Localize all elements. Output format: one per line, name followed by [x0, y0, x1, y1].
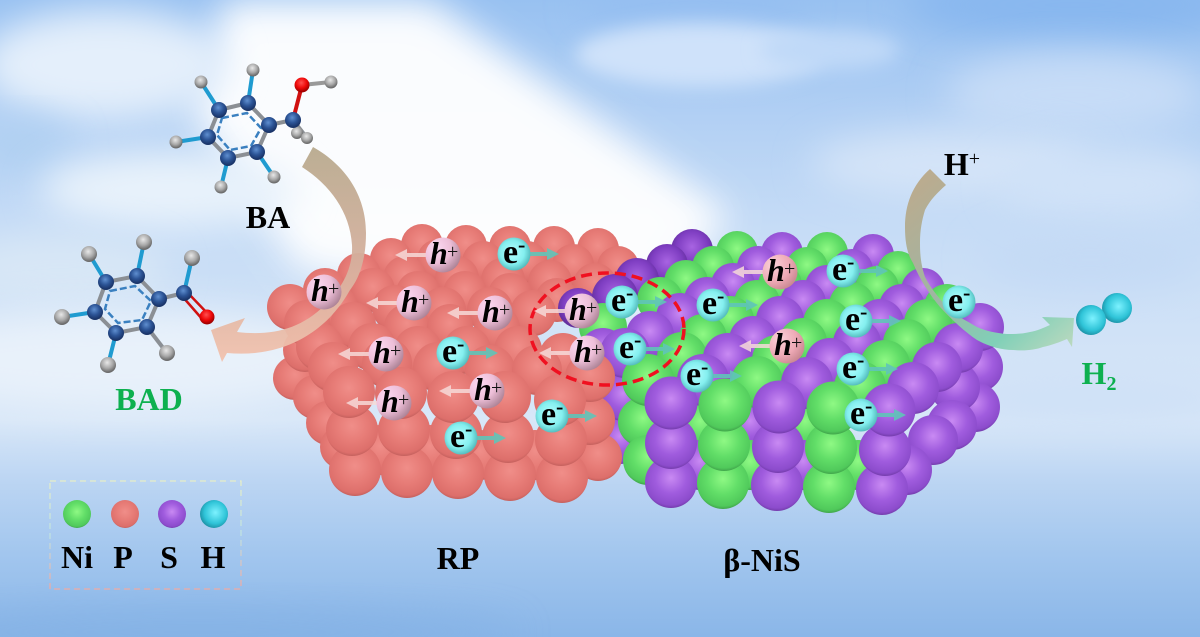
electron particle: e	[541, 396, 556, 433]
electron particle: e	[850, 395, 865, 432]
electron particle	[536, 394, 597, 433]
hole particle	[346, 383, 412, 420]
hole particle	[366, 283, 432, 320]
electron particle: e	[948, 282, 963, 319]
label: BAD: BAD	[115, 381, 183, 417]
label: BA: BA	[246, 199, 290, 235]
electron particle	[844, 393, 906, 432]
electron particle	[498, 232, 559, 271]
hole particle: h	[482, 293, 500, 329]
electron particle: -	[634, 327, 641, 352]
electron particle	[680, 354, 742, 393]
hole particle	[739, 326, 804, 364]
hole particle: h	[311, 272, 329, 308]
hole particle: +	[491, 377, 502, 399]
electron particle: -	[701, 354, 708, 379]
electron particle: e	[842, 349, 857, 386]
electron particle: e	[686, 356, 701, 393]
label: H+: +	[969, 148, 980, 170]
legend item: H	[200, 500, 228, 575]
label: H+: H	[944, 146, 969, 182]
legend item: S	[158, 500, 186, 575]
arrow: H+ to H2	[905, 169, 1074, 350]
hole particle: h	[373, 334, 391, 370]
legend item: S: S	[160, 539, 178, 575]
red dashed interface ellipse	[530, 273, 684, 385]
electron particle	[942, 280, 976, 319]
hole particle	[395, 235, 460, 272]
hole particle: +	[591, 339, 602, 361]
molecule: H2	[1076, 293, 1132, 335]
RP crystal, front rows	[284, 300, 622, 503]
electron particle: e	[442, 333, 457, 370]
electron particle: -	[963, 280, 970, 305]
electron particle: -	[717, 283, 724, 308]
legend item: P: P	[113, 539, 133, 575]
beta-NiS crystal	[558, 229, 1004, 515]
hole particle: h	[430, 235, 448, 271]
hole particle: h	[774, 326, 792, 362]
hole carriers on RP	[306, 235, 604, 420]
legend item: P	[111, 500, 139, 575]
electron particle: e	[845, 301, 860, 338]
hole particle: +	[586, 297, 597, 319]
hole particle: +	[784, 258, 795, 280]
electron particle: e	[702, 285, 717, 322]
label: H2: 2	[1106, 373, 1116, 395]
electron particle: -	[865, 393, 872, 418]
RP crystal, rear rows	[267, 224, 639, 469]
hole particle: +	[447, 241, 458, 263]
electron particle	[696, 283, 758, 322]
hole particle: h	[574, 333, 592, 369]
hole particle: h	[381, 383, 399, 419]
hole particle: h	[767, 252, 785, 288]
hole particle: +	[791, 332, 802, 354]
hole particle: h	[569, 291, 587, 327]
electron particle	[606, 280, 667, 319]
electron particle: -	[556, 394, 563, 419]
hole particle	[447, 293, 512, 330]
hole particle	[306, 272, 342, 310]
molecule: BA benzyl alcohol	[170, 64, 338, 194]
label: RP: RP	[437, 540, 479, 576]
electron particle	[826, 249, 888, 288]
hole particle	[338, 334, 404, 372]
hole particle: h	[474, 371, 492, 407]
electron particle: e	[503, 234, 518, 271]
hole particle: +	[418, 289, 429, 311]
electron particle: -	[860, 299, 867, 324]
electron particle: e	[450, 418, 465, 455]
electron particle: -	[457, 331, 464, 356]
electron particle: -	[847, 249, 854, 274]
electron particle: e	[832, 251, 847, 288]
electron particle: e	[611, 282, 626, 319]
electron particle	[614, 327, 675, 366]
hole particle	[534, 291, 600, 328]
label: beta-NiS: β-NiS	[723, 542, 801, 578]
hole particle: +	[499, 299, 510, 321]
molecule: BAD benzaldehyde	[54, 234, 214, 373]
arrow: BA to BAD	[211, 147, 366, 362]
electron particle: -	[626, 280, 633, 305]
hole particle	[732, 252, 798, 290]
hole particle: +	[398, 389, 409, 411]
hole particle: h	[401, 283, 419, 319]
legend item: Ni	[61, 500, 93, 575]
electron carriers	[436, 232, 976, 455]
electron particle: -	[465, 416, 472, 441]
electron particle	[840, 299, 901, 338]
hole particle	[539, 333, 604, 370]
legend item: H: H	[201, 539, 226, 575]
electron particle: e	[619, 329, 634, 366]
electron particle	[444, 416, 506, 455]
electron particle: -	[518, 232, 525, 257]
electron particle	[836, 347, 898, 386]
hole particle: +	[390, 340, 401, 362]
electron particle: -	[857, 347, 864, 372]
electron particle	[436, 331, 498, 370]
hole particle	[439, 371, 504, 408]
label: H2: H	[1082, 355, 1106, 391]
legend	[50, 481, 241, 589]
legend item: Ni: Ni	[61, 539, 93, 575]
hole carriers on NiS	[732, 252, 804, 364]
hole particle: +	[328, 278, 339, 300]
